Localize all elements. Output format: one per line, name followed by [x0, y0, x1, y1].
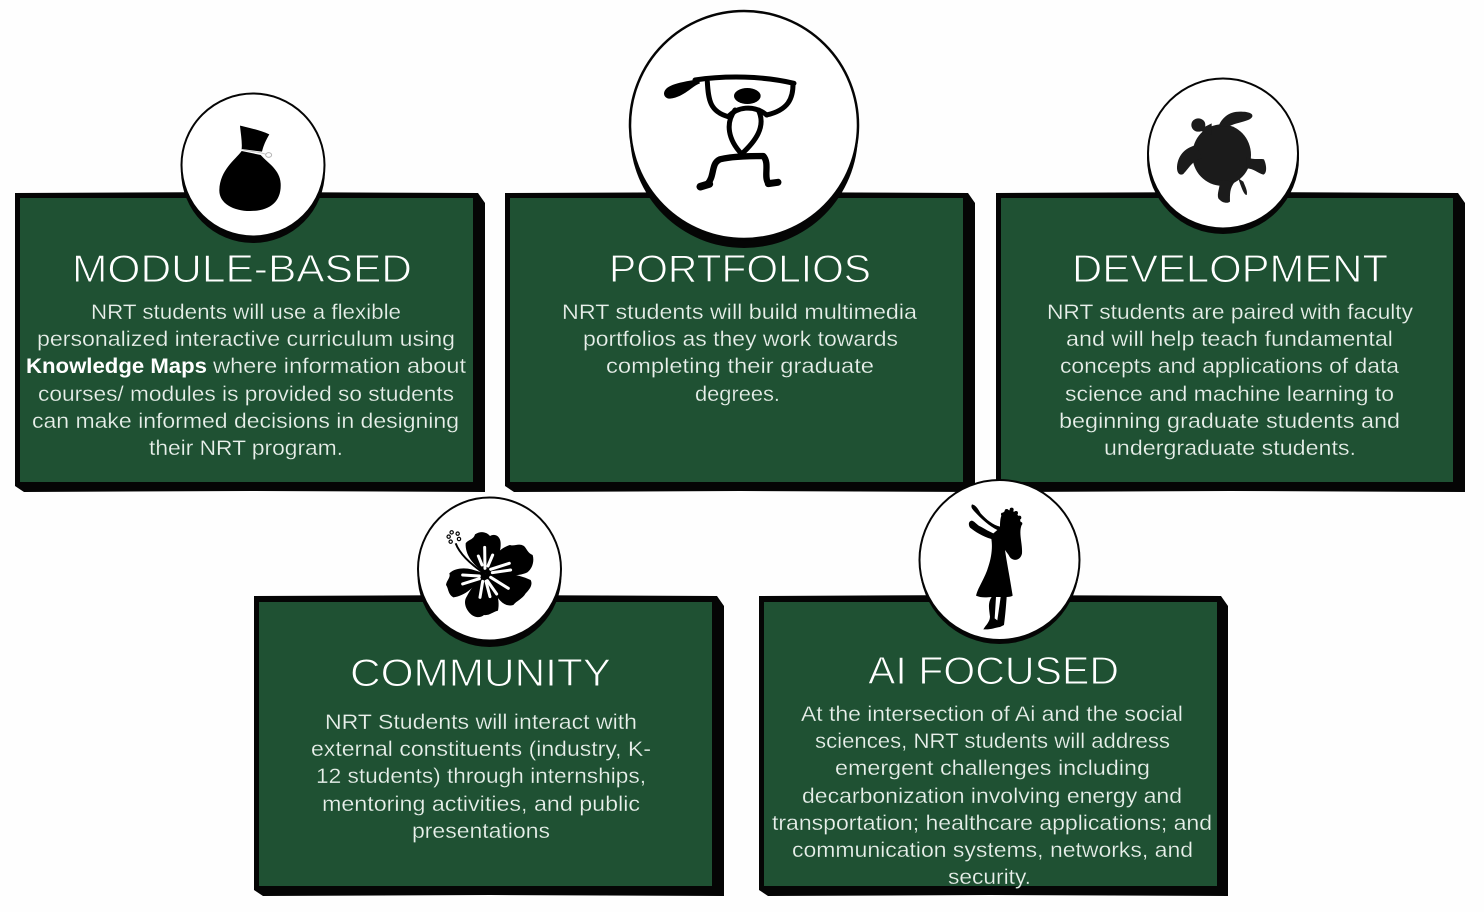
text block: development description [1047, 300, 1413, 460]
text block: community description: presentations [412, 819, 550, 843]
text block: community description: external constituents (industry, K- [311, 737, 651, 761]
text block: AI focused description: emergent challenges including [835, 756, 1150, 780]
heading: AI focused: AI FOCUSED [868, 650, 1119, 693]
card background [15, 192, 485, 492]
text block: development description: concepts and applications of data [1060, 354, 1399, 378]
icon: hula dancer in circle [920, 480, 1080, 644]
text block: development description: and will help teach fundamental [1066, 327, 1393, 351]
text block: AI focused description: transportation; healthcare applications; and [772, 811, 1212, 835]
text block: portfolios description: completing their graduate [606, 354, 874, 378]
text block: portfolios description: degrees. [695, 382, 780, 406]
text block: module-based description: can make informed decisions in designing [32, 409, 459, 433]
panel: AI focused [759, 480, 1228, 896]
text block: portfolios description [562, 300, 917, 406]
text block: AI focused description: security. [948, 865, 1031, 889]
panel: module-based [15, 94, 485, 492]
card background [759, 595, 1228, 896]
heading: portfolios: PORTFOLIOS [609, 248, 871, 291]
heading: community: COMMUNITY [350, 652, 611, 695]
text block: AI focused description: At the intersection of Ai and the social [801, 702, 1183, 726]
card background [996, 192, 1465, 492]
text block: AI focused description [772, 702, 1212, 889]
panel: community [254, 498, 724, 896]
text block: module-based description [26, 300, 466, 460]
icon: cloth bag in circle [181, 94, 325, 243]
text block: AI focused description: communication systems, networks, and [792, 838, 1193, 862]
text block: community description: NRT Students will interact with [325, 710, 637, 734]
icon: sea turtle in circle [1147, 78, 1299, 234]
text block: development description: science and machine learning to [1065, 382, 1394, 406]
panel: portfolios [505, 11, 975, 492]
heading: development: DEVELOPMENT [1072, 248, 1388, 291]
text block: AI focused description: sciences, NRT students will address [815, 729, 1170, 753]
panel: development [996, 78, 1465, 492]
text block: module-based description: personalized interactive curriculum using [37, 327, 455, 351]
text block: portfolios description: portfolios as they work towards [583, 327, 898, 351]
icon: hibiscus flower in circle [418, 498, 562, 647]
text block: development description: NRT students are paired with faculty [1047, 300, 1413, 324]
text block: portfolios description: NRT students will build multimedia [562, 300, 917, 324]
text block: development description: beginning graduate students and [1059, 409, 1400, 433]
text block: module-based description: their NRT program. [149, 436, 343, 460]
card background [254, 595, 724, 896]
card background [505, 192, 975, 492]
text block: module-based description: where information about [212, 354, 466, 378]
text block: community description: 12 students) through internships, [316, 764, 646, 788]
icon: petroglyph paddler in circle [630, 11, 858, 248]
text block: AI focused description: decarbonization involving energy and [802, 784, 1182, 808]
text block: community description: mentoring activities, and public [322, 792, 640, 816]
text block: module-based description: NRT students will use a flexible [91, 300, 401, 324]
heading: module-based: MODULE-BASED [72, 248, 412, 291]
text block: community description [311, 710, 651, 843]
text block: development description: undergraduate students. [1104, 436, 1356, 460]
text block: module-based description: courses/ modules is provided so students [38, 382, 454, 406]
text block: module-based description: Knowledge Maps [26, 354, 207, 378]
